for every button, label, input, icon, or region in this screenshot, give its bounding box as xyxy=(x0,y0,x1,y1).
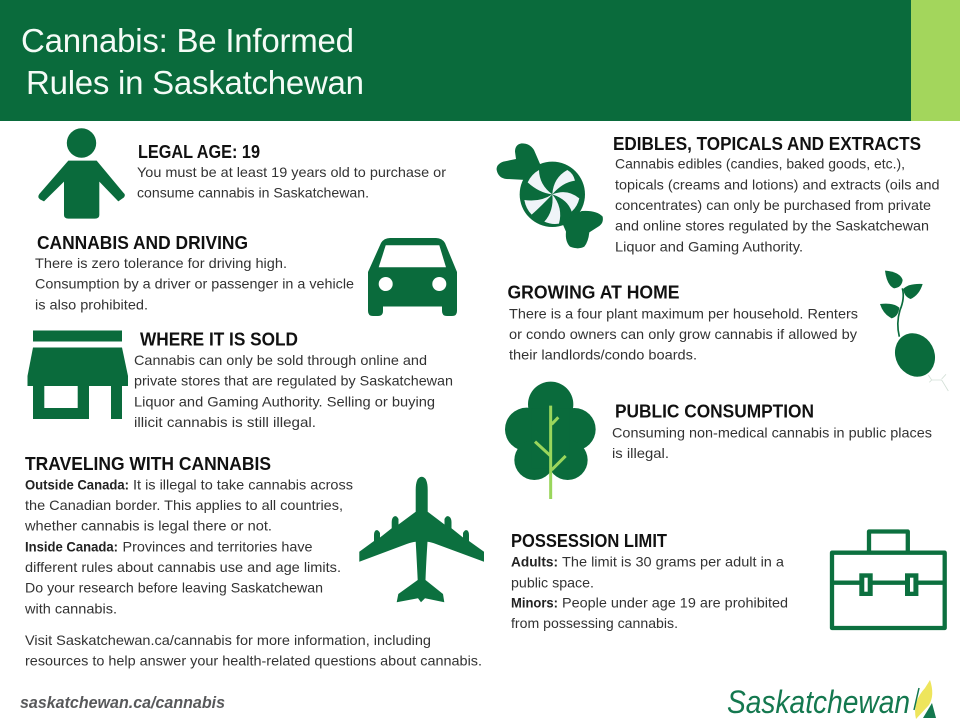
section: growing at home xyxy=(508,282,858,363)
section: traveling with cannabis: Do your research before leaving Saskatchewan xyxy=(25,580,323,596)
section: where it is sold: WHERE IT IS SOLD xyxy=(140,330,298,350)
section: where it is sold: illicit cannabis is still illegal. xyxy=(134,414,316,430)
logo: Saskatchewan: Saskatchewan xyxy=(727,684,910,720)
section: legal age xyxy=(137,142,446,200)
section: traveling with cannabis: Outside Canada: xyxy=(25,476,129,492)
section: edibles: and online stores regulated by the Saskatchewan xyxy=(615,218,929,234)
section: edibles: topicals (creams and lotions) and extracts (oils and xyxy=(615,176,940,192)
section: growing at home: their landlords/condo boards. xyxy=(509,347,697,363)
section: where it is sold: Liquor and Gaming Authority. Selling or buying xyxy=(134,393,435,409)
section: traveling with cannabis: Provinces and territories have xyxy=(122,538,313,554)
section: where it is sold: private stores that are regulated by Saskatchewan xyxy=(134,373,453,389)
section: legal age: You must be at least 19 years old to purchase or xyxy=(137,164,446,180)
section: possession limit: from possessing cannabis. xyxy=(511,615,678,631)
title: Rules in Saskatchewan xyxy=(26,64,364,101)
icon: airplane xyxy=(359,477,484,602)
section: traveling with cannabis: the Canadian border. This applies to all countries, xyxy=(25,497,343,513)
section: possession limit: Adults: xyxy=(511,554,558,570)
section: public consumption: Consuming non-medical cannabis in public places xyxy=(612,424,932,440)
section: where it is sold: Cannabis can only be sold through online and xyxy=(134,352,427,368)
section: cannabis and driving: There is zero tolerance for driving high. xyxy=(35,255,287,271)
section: traveling with cannabis: different rules about cannabis use and age limits. xyxy=(25,559,341,575)
section: public consumption: PUBLIC CONSUMPTION xyxy=(615,402,814,422)
section: possession limit: People under age 19 are prohibited xyxy=(562,594,788,610)
section: legal age: LEGAL AGE: 19 xyxy=(138,142,260,162)
section: edibles: EDIBLES, TOPICALS AND EXTRACTS xyxy=(613,134,921,154)
icon: candy xyxy=(497,143,603,248)
section: edibles xyxy=(613,134,940,254)
section: cannabis and driving: is also prohibited. xyxy=(35,296,148,312)
title: Cannabis: Be Informed xyxy=(21,22,354,59)
section: edibles: concentrates) can only be purchased from private xyxy=(615,197,931,213)
section: traveling with cannabis: with cannabis. xyxy=(24,600,117,616)
icon: car xyxy=(368,238,457,316)
website url: saskatchewan.ca/cannabis xyxy=(20,693,225,712)
icon: tree xyxy=(505,382,596,499)
section: possession limit xyxy=(511,531,788,631)
section: public consumption: is illegal. xyxy=(612,445,669,461)
section: possession limit: POSSESSION LIMIT xyxy=(511,531,667,551)
section: traveling with cannabis: TRAVELING WITH CANNABIS xyxy=(25,454,271,474)
title xyxy=(21,22,364,101)
section: growing at home: or condo owners can only grow cannabis if allowed by xyxy=(509,326,857,342)
section: edibles: Liquor and Gaming Authority. xyxy=(615,238,803,254)
visit text: Visit Saskatchewan.ca/cannabis for more information, including xyxy=(25,632,431,648)
section: traveling with cannabis: Inside Canada: xyxy=(25,538,118,554)
visit text: resources to help answer your health-related questions about cannabis. xyxy=(25,653,482,669)
section: cannabis and driving xyxy=(35,233,354,312)
section: traveling with cannabis: whether cannabis is legal there or not. xyxy=(24,518,272,534)
section: traveling with cannabis: It is illegal to take cannabis across xyxy=(133,476,353,492)
header banner xyxy=(0,0,960,121)
icon: store xyxy=(28,330,128,419)
section: growing at home: GROWING AT HOME xyxy=(508,282,680,302)
section: possession limit: The limit is 30 grams per adult in a xyxy=(562,554,784,570)
section: cannabis and driving: Consumption by a driver or passenger in a vehicle xyxy=(35,276,354,292)
section: growing at home: There is a four plant maximum per household. Renters xyxy=(509,305,858,321)
section: edibles: Cannabis edibles (candies, baked goods, etc.), xyxy=(615,156,905,172)
section: traveling with cannabis xyxy=(24,454,353,616)
section: legal age: consume cannabis in Saskatchewan. xyxy=(137,184,369,200)
section: where it is sold xyxy=(134,330,453,430)
icon: person xyxy=(38,128,125,219)
section: cannabis and driving: CANNABIS AND DRIVING xyxy=(37,233,248,253)
visit text xyxy=(25,632,482,669)
section: possession limit: public space. xyxy=(511,574,594,590)
section: public consumption xyxy=(612,402,932,461)
section: possession limit: Minors: xyxy=(511,594,558,610)
icon: plant xyxy=(880,271,948,391)
icon: briefcase xyxy=(832,532,945,628)
